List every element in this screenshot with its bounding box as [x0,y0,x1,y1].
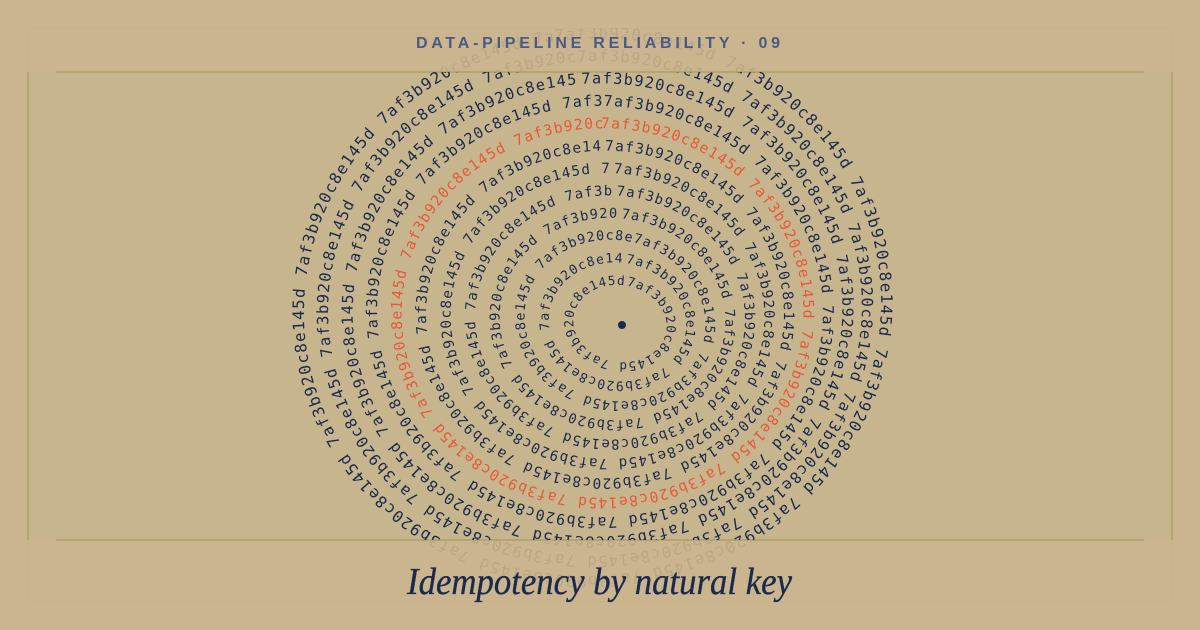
ring 12: 7af3b920c8e145d 7af3b920c8e145d 7af3b920c8e145d 7af3b920c8e145d 7af3b920c8e145d 7af3b920c8e145d 7af3b920c8e145d 7af3b920c8e145d 7af3b920c8e145d 7af3b920c8e145d 7af3b920c8e145d 7af3b920c8e145d 7af3b920c8e145d 7af3b920c8e145d [292,72,893,540]
ring 5: 7af3b920c8e145d 7af3b920c8e145d 7af3b920c8e145d 7af3b920c8e145d 7af3b920c8e145d 7af3b920c8e145d 7af3b920c8e145d [464,184,756,450]
ring 8 highlighted: 7af3b920c8e145d 7af3b920c8e145d 7af3b920c8e145d 7af3b920c8e145d 7af3b920c8e145d 7af3b920c8e145d 7af3b920c8e145d 7af3b920c8e145d 7af3b920c8e145d 7af3b920c8e145d [391,117,815,508]
ring 10: 7af3b920c8e145d 7af3b920c8e145d 7af3b920c8e145d 7af3b920c8e145d 7af3b920c8e145d 7af3b920c8e145d 7af3b920c8e145d 7af3b920c8e145d 7af3b920c8e145d 7af3b920c8e145d 7af3b920c8e145d 7af3b920c8e145d [341,72,854,540]
faded overflow of outer rings: 7af3b920c8e145d 7af3b920c8e145d 7af3b920c8e145d 7af3b920c8e145d 7af3b920c8e145d 7af3b920c8e145d 7af3b920c8e145d 7af3b920c8e145d 7af3b920c8e145d 7af3b920c8e145d 7af3b920c8e145d 7af3b920c8e145d 7af3b920c8e145d [472,49,712,568]
ring 4: 7af3b920c8e145d 7af3b920c8e145d 7af3b920c8e145d 7af3b920c8e145d 7af3b920c8e145d 7af3b920c8e145d [489,208,736,431]
title: Idempotency by natural key [406,561,792,603]
faded overflow of outer rings: 7af3b920c8e145d 7af3b920c8e145d 7af3b920c8e145d 7af3b920c8e145d 7af3b920c8e145d 7af3b920c8e145d 7af3b920c8e145d 7af3b920c8e145d 7af3b920c8e145d 7af3b920c8e145d 7af3b920c8e145d 7af3b920c8e145d [533,541,656,548]
panel frame lines [27,71,1173,541]
ring 1: 7af3b920c8e145d 7af3b920c8e145d 7af3b920c8e145d [564,276,676,372]
ring 2: 7af3b920c8e145d 7af3b920c8e145d 7af3b920c8e145d 7af3b920c8e145d [539,253,696,392]
ring 3: 7af3b920c8e145d 7af3b920c8e145d 7af3b920c8e145d 7af3b920c8e145d 7af3b920c8e145d [515,230,716,411]
ring 7: 7af3b920c8e145d 7af3b920c8e145d 7af3b920c8e145d 7af3b920c8e145d 7af3b920c8e145d 7af3b920c8e145d 7af3b920c8e145d 7af3b920c8e145d 7af3b920c8e145d [415,140,794,490]
concentric hash rings [292,72,893,540]
ring 6: 7af3b920c8e145d 7af3b920c8e145d 7af3b920c8e145d 7af3b920c8e145d 7af3b920c8e145d 7af3b920c8e145d 7af3b920c8e145d 7af3b920c8e145d [440,162,775,470]
faded overflow of outer rings: 7af3b920c8e145d 7af3b920c8e145d 7af3b920c8e145d 7af3b920c8e145d 7af3b920c8e145d 7af3b920c8e145d 7af3b920c8e145d 7af3b920c8e145d 7af3b920c8e145d 7af3b920c8e145d 7af3b920c8e145d 7af3b920c8e145d 7af3b920c8e145d 7af3b920c8e145d [423,28,756,588]
faded overflow of outer rings: 7af3b920c8e145d 7af3b920c8e145d 7af3b920c8e145d 7af3b920c8e145d 7af3b920c8e145d 7af3b920c8e145d 7af3b920c8e145d 7af3b920c8e145d 7af3b920c8e145d 7af3b920c8e145d 7af3b920c8e145d [359,88,841,535]
faded overflow of outer rings [423,28,756,588]
ring 11: 7af3b920c8e145d 7af3b920c8e145d 7af3b920c8e145d 7af3b920c8e145d 7af3b920c8e145d 7af3b920c8e145d 7af3b920c8e145d 7af3b920c8e145d 7af3b920c8e145d 7af3b920c8e145d 7af3b920c8e145d 7af3b920c8e145d 7af3b920c8e145d [316,72,874,540]
center dot [618,321,626,329]
eyebrow heading: DATA-PIPELINE RELIABILITY · 09 [416,35,780,52]
inner panel [28,72,1172,540]
ring 9: 7af3b920c8e145d 7af3b920c8e145d 7af3b920c8e145d 7af3b920c8e145d 7af3b920c8e145d 7af3b920c8e145d 7af3b920c8e145d 7af3b920c8e145d 7af3b920c8e145d 7af3b920c8e145d 7af3b920c8e145d [366,94,834,528]
